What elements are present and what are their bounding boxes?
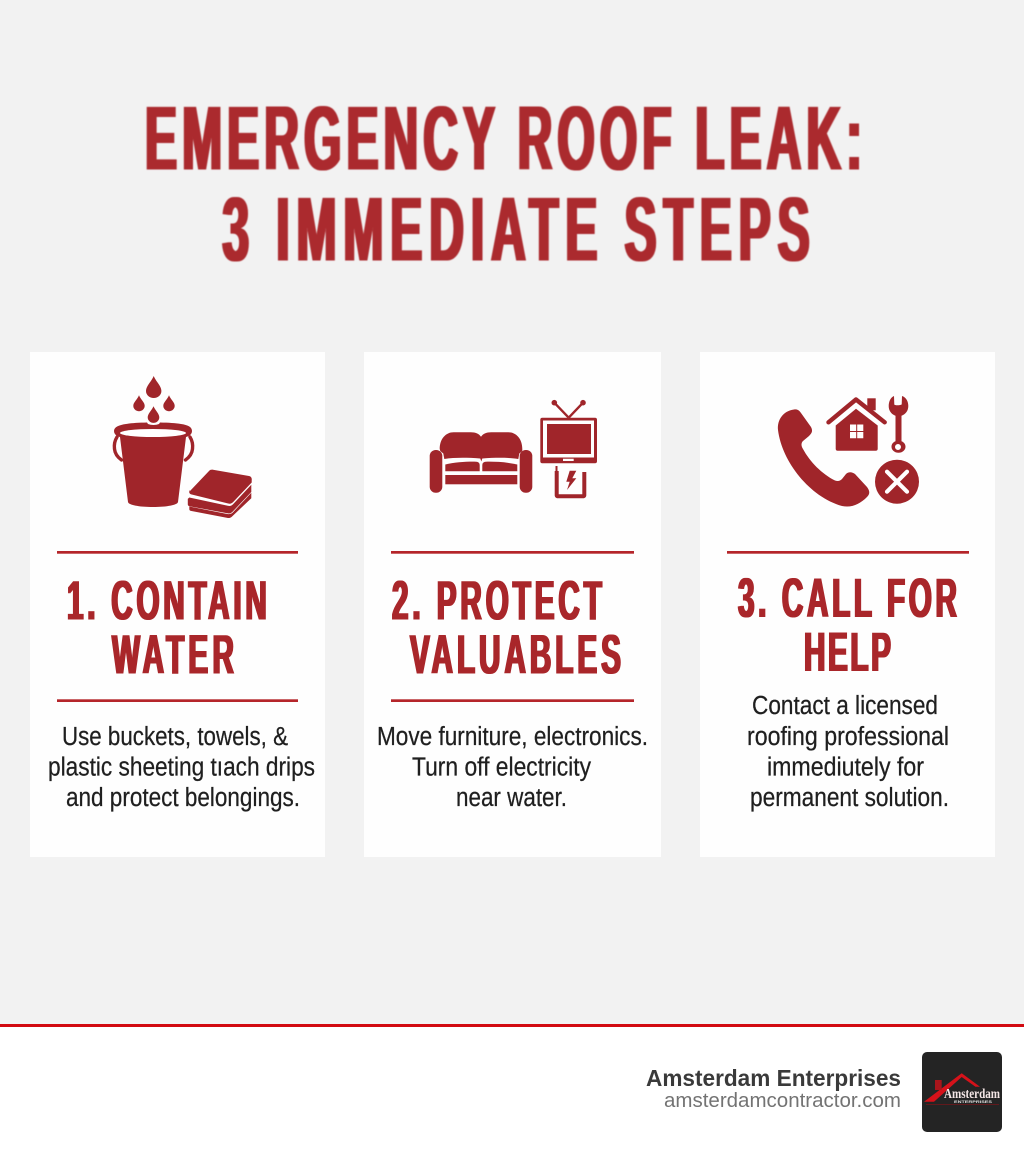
icon: sofa and television (430, 400, 597, 498)
title: 3 IMMEDIATE STEPS (222, 179, 810, 281)
heading: 3. call for help: 3. CALL FOR (738, 567, 957, 629)
text: call for help description (747, 692, 949, 812)
title (145, 88, 862, 281)
heading: 2. protect valuables: 2. PROTECT (392, 570, 602, 632)
panel: contain water (30, 352, 325, 857)
text: contain water description (48, 723, 315, 812)
footer website: amsterdamcontractor.com (664, 1090, 901, 1112)
text: protect valuables description: near water. (456, 784, 567, 812)
icon: phone, house, wrench and cross (778, 396, 919, 507)
heading: 1. contain water: 1. CONTAIN (67, 570, 267, 632)
panel: protect valuables (364, 352, 661, 857)
text: protect valuables description: Move furniture, electronics. (377, 723, 648, 751)
heading: 3. call for help (738, 567, 957, 683)
text: call for help description: Contact a licensed (752, 692, 938, 720)
heading: 2. protect valuables (392, 570, 621, 686)
heading: 1. contain water (67, 570, 267, 686)
text: protect valuables description (377, 723, 648, 812)
heading: 3. call for help: HELP (804, 621, 891, 683)
icon: bucket with drops and towels (114, 376, 252, 518)
logo: ENTERPRISES (954, 1099, 992, 1104)
text: call for help description: permanent solution. (750, 784, 949, 812)
heading: 1. contain water: WATER (112, 624, 234, 686)
text: call for help description: roofing professional (747, 723, 949, 751)
logo (922, 1052, 1002, 1132)
text: call for help description: immediutely for (767, 754, 924, 782)
panel: call for help (700, 352, 995, 857)
title: EMERGENCY ROOF LEAK: (145, 88, 862, 189)
text: contain water description: plastic sheeting tıach drips (48, 754, 315, 782)
heading: 2. protect valuables: VALUABLES (410, 624, 621, 686)
footer (0, 1024, 1024, 1154)
text: protect valuables description: Turn off electricity (412, 754, 591, 782)
footer company name: Amsterdam Enterprises (646, 1065, 901, 1091)
logo: Amsterdam (944, 1087, 1000, 1102)
text: contain water description: Use buckets, towels, & (62, 723, 288, 751)
text: contain water description: and protect belongings. (66, 784, 300, 812)
